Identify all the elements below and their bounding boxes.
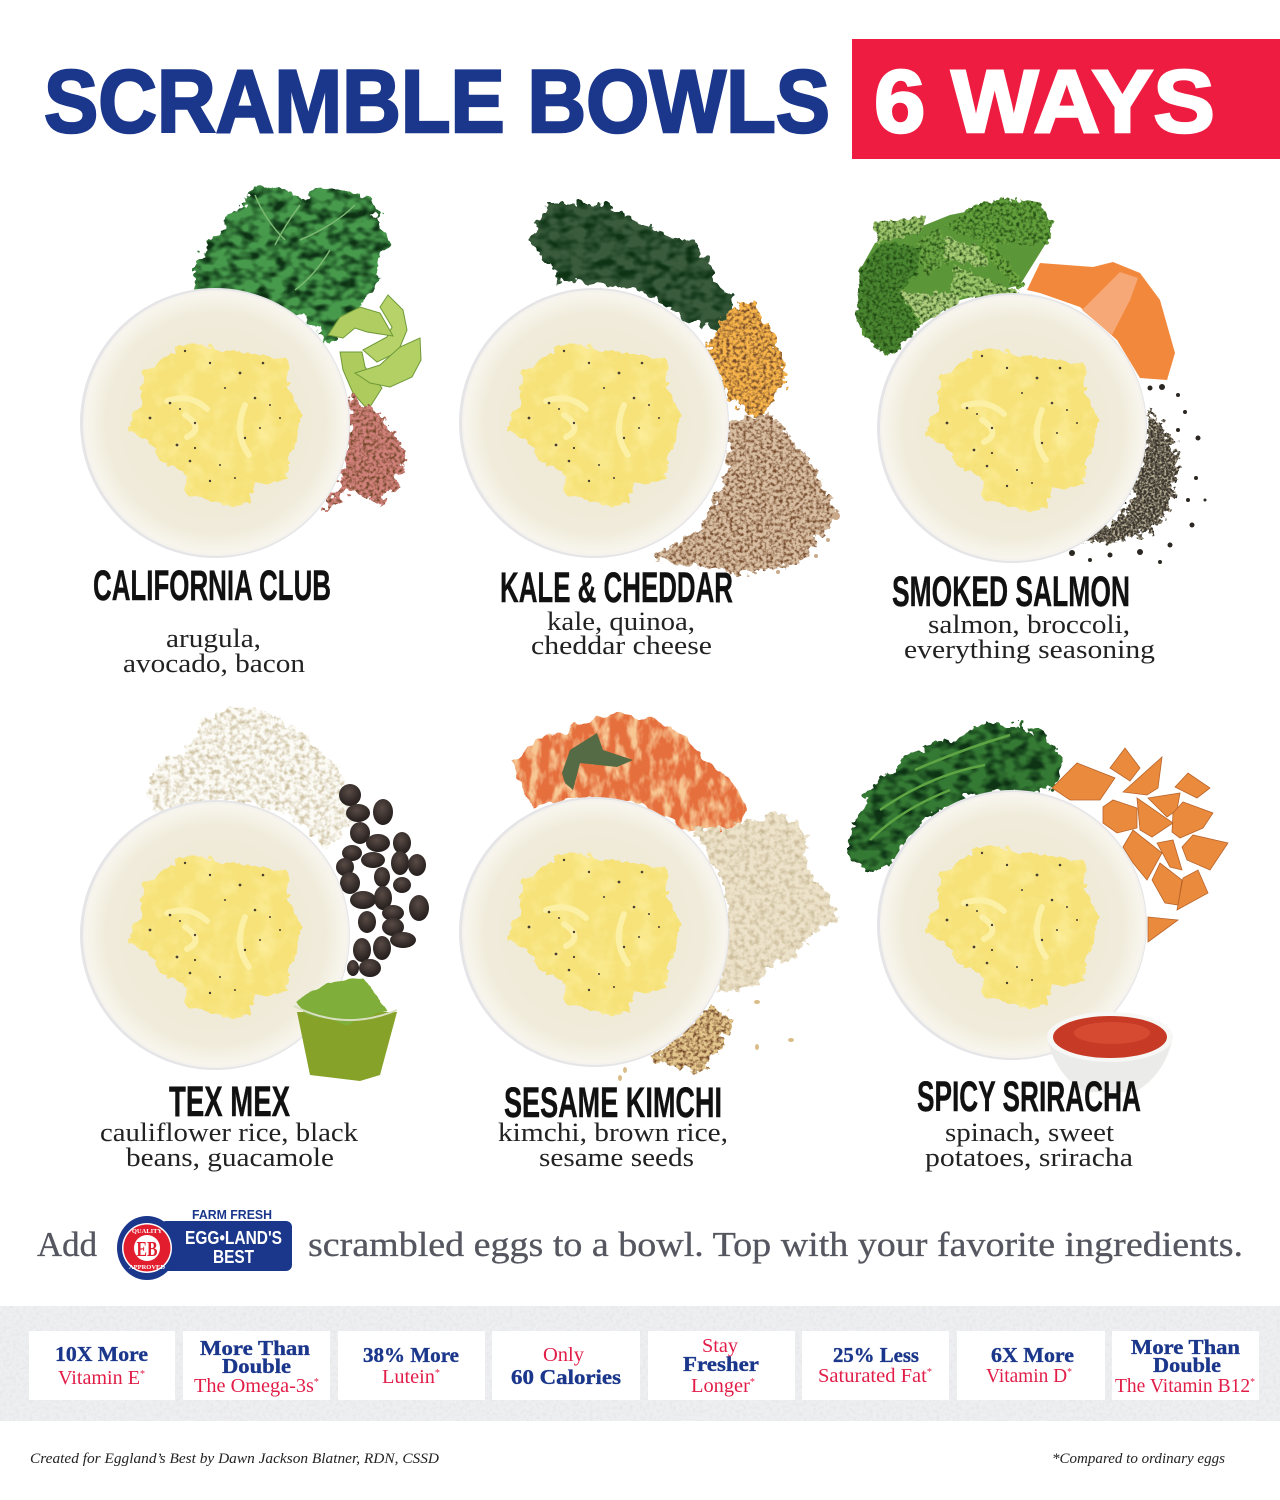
ingredient: bacon bbox=[322, 396, 406, 514]
card: 6X more vitamin D: 6X More bbox=[991, 1343, 1074, 1367]
description: spinach, sweet bbox=[945, 1118, 1115, 1147]
panel: Tex Mex bbox=[80, 707, 429, 1172]
description: arugula, bbox=[166, 624, 261, 653]
bowl of scrambled eggs bbox=[877, 293, 1147, 563]
bowl of scrambled eggs bbox=[80, 288, 350, 558]
card: 25% less saturated fat: 25% Less bbox=[833, 1343, 919, 1367]
card: 6X more vitamin D: * bbox=[1067, 1367, 1072, 1378]
logo: Eggland's Best: EGG•LAND'S bbox=[185, 1228, 282, 1248]
card: 10X more vitamin E bbox=[29, 1331, 175, 1400]
ingredient: guacamole cup bbox=[294, 978, 397, 1081]
footnote: *Compared to ordinary eggs bbox=[1052, 1451, 1225, 1467]
card: more than double omega-3s: More Than bbox=[200, 1336, 310, 1360]
card: more than double vitamin B12: The Vitamin B12 bbox=[1115, 1375, 1253, 1397]
card: 10X more vitamin E: Vitamin E bbox=[58, 1367, 140, 1389]
description: sesame seeds bbox=[539, 1143, 694, 1172]
ingredient: sweet potatoes bbox=[1052, 748, 1228, 942]
card: more than double vitamin B12 bbox=[1112, 1331, 1259, 1400]
card: only 60 calories: 60 Calories bbox=[511, 1365, 621, 1389]
card: stay fresher longer: Stay bbox=[702, 1335, 738, 1357]
card: only 60 calories bbox=[492, 1331, 640, 1400]
heading: KALE & CHEDDAR bbox=[500, 564, 733, 612]
heading: SMOKED SALMON bbox=[892, 568, 1130, 616]
panel: Spicy Sriracha bbox=[846, 716, 1228, 1172]
ingredient: cheddar bbox=[706, 300, 787, 418]
ingredient: brown rice bbox=[693, 810, 837, 993]
description: cheddar cheese bbox=[531, 631, 712, 660]
instruction line: scrambled eggs to a bowl. Top with your favorite ingredients. bbox=[308, 1225, 1243, 1264]
title: SCRAMBLE BOWLS bbox=[44, 51, 830, 151]
description: kale, quinoa, bbox=[547, 607, 695, 636]
card: more than double omega-3s: * bbox=[314, 1377, 319, 1388]
logo: Eggland's Best: BEST bbox=[213, 1247, 254, 1267]
logo: Eggland's Best: QUALITY bbox=[132, 1228, 162, 1235]
ingredient: cauliflower rice bbox=[145, 707, 353, 848]
panel: California Club bbox=[80, 184, 421, 678]
card: stay fresher longer bbox=[648, 1331, 795, 1400]
benefits band bbox=[0, 1306, 1280, 1421]
title badge: 6 ways: 6 WAYS bbox=[874, 51, 1215, 151]
card: more than double vitamin B12: More Than bbox=[1131, 1335, 1240, 1359]
description: salmon, broccoli, bbox=[928, 610, 1130, 639]
instruction line: Add bbox=[37, 1225, 97, 1264]
panel: Kale & Cheddar bbox=[459, 204, 840, 660]
bowl of scrambled eggs bbox=[459, 288, 729, 558]
card: 6X more vitamin D: Vitamin D bbox=[986, 1365, 1070, 1387]
ingredient: quinoa bbox=[652, 414, 840, 574]
ingredient: spinach bbox=[846, 716, 1064, 868]
card: more than double vitamin B12: Double bbox=[1153, 1353, 1221, 1377]
card: 38% more lutein: * bbox=[435, 1368, 440, 1379]
ingredient: kale bbox=[528, 204, 730, 333]
card: 10X more vitamin E: * bbox=[140, 1369, 145, 1380]
ingredient: sriracha dish bbox=[1047, 1012, 1173, 1092]
description: potatoes, sriracha bbox=[925, 1143, 1134, 1172]
description: cauliflower rice, black bbox=[100, 1118, 358, 1147]
card: more than double omega-3s bbox=[183, 1331, 330, 1400]
heading: SESAME KIMCHI bbox=[504, 1079, 722, 1127]
card: 38% more lutein bbox=[338, 1331, 485, 1400]
logo: Eggland's Best bbox=[117, 1208, 292, 1280]
card: 25% less saturated fat bbox=[802, 1331, 949, 1400]
card: stay fresher longer: Fresher bbox=[683, 1352, 759, 1376]
bowl of scrambled eggs bbox=[459, 797, 729, 1067]
card: 38% more lutein: 38% More bbox=[363, 1343, 459, 1367]
card: 10X more vitamin E: 10X More bbox=[55, 1342, 148, 1366]
ingredient: black beans bbox=[336, 784, 429, 977]
ingredient: kimchi bbox=[513, 713, 750, 830]
heading: SPICY SRIRACHA bbox=[917, 1073, 1141, 1121]
card: 25% less saturated fat: Saturated Fat bbox=[818, 1365, 924, 1387]
heading: CALIFORNIA CLUB bbox=[93, 562, 331, 610]
description: kimchi, brown rice, bbox=[498, 1118, 728, 1147]
panel: Sesame Kimchi bbox=[459, 713, 837, 1172]
bowl of scrambled eggs bbox=[80, 800, 350, 1070]
description: beans, guacamole bbox=[126, 1143, 334, 1172]
title badge: 6 ways bbox=[852, 39, 1280, 159]
card: stay fresher longer: * bbox=[750, 1377, 755, 1388]
card: stay fresher longer: Longer bbox=[691, 1375, 749, 1397]
ingredient: avocado bbox=[328, 295, 421, 410]
card: 6X more vitamin D bbox=[957, 1331, 1105, 1400]
bowl of scrambled eggs bbox=[877, 790, 1147, 1060]
ingredient: sesame seeds bbox=[618, 1000, 794, 1081]
panel: Smoked Salmon bbox=[855, 198, 1206, 664]
logo: Eggland's Best: FARM FRESH bbox=[192, 1208, 272, 1222]
card: 38% more lutein: Lutein bbox=[382, 1366, 434, 1388]
ingredient: everything seasoning bbox=[1069, 384, 1206, 564]
card: more than double omega-3s: Double bbox=[222, 1354, 291, 1378]
logo: Eggland's Best: APPROVED bbox=[129, 1264, 165, 1271]
card: 25% less saturated fat: * bbox=[927, 1367, 932, 1378]
description: everything seasoning bbox=[904, 635, 1155, 664]
ingredient: broccoli bbox=[855, 198, 1053, 357]
card: more than double omega-3s: The Omega-3s bbox=[194, 1375, 312, 1397]
card: only 60 calories: Only bbox=[543, 1344, 584, 1366]
ingredient: arugula bbox=[194, 184, 388, 345]
card: more than double vitamin B12: * bbox=[1250, 1377, 1255, 1388]
ingredient: smoked salmon bbox=[1027, 262, 1175, 380]
description: avocado, bacon bbox=[123, 649, 305, 678]
credit line: Created for Eggland’s Best by Dawn Jackson Blatner, RDN, CSSD bbox=[30, 1451, 440, 1467]
heading: TEX MEX bbox=[169, 1078, 290, 1126]
logo: Eggland's Best: EB bbox=[136, 1237, 158, 1261]
